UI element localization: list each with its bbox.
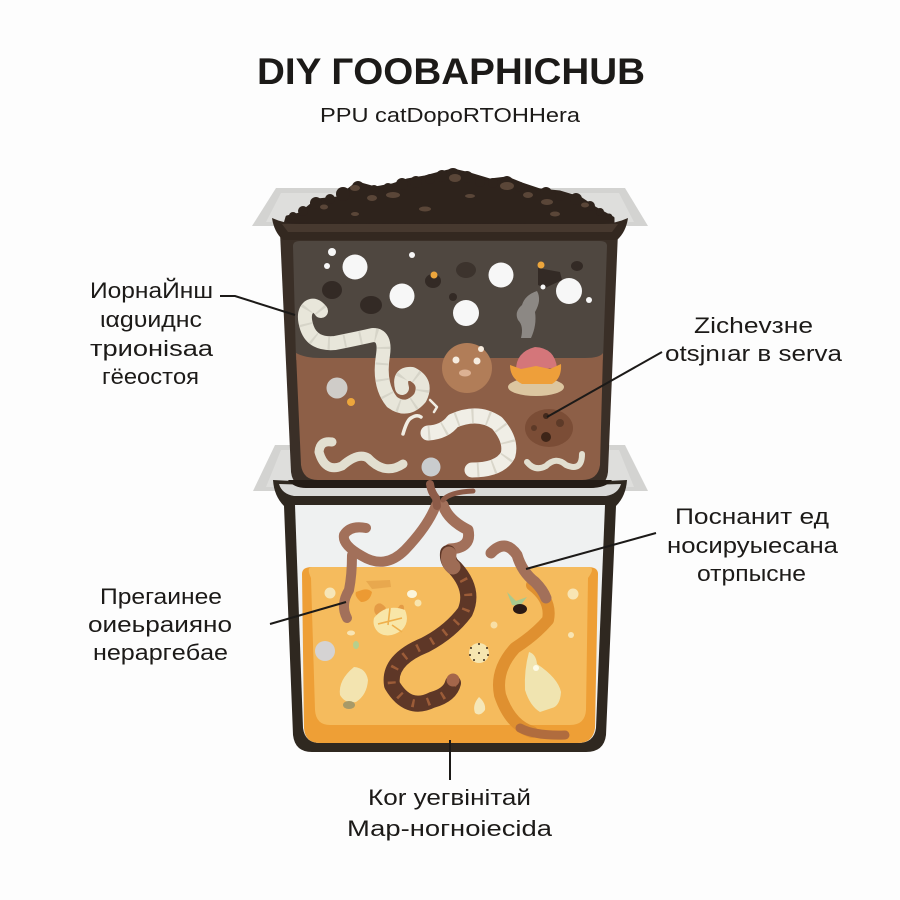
label: top right bbox=[665, 313, 843, 366]
label: top left: ИорнаЙнш bbox=[90, 278, 213, 303]
title: DIY ГOOBAPHICHUB bbox=[257, 51, 645, 92]
soil mound bbox=[285, 168, 613, 226]
label: lower right: Поснанит ед bbox=[675, 504, 829, 529]
label: lower left: неpаргeбae bbox=[93, 640, 228, 665]
label: top left bbox=[90, 278, 214, 389]
label: top right: Zichevзне bbox=[694, 313, 813, 338]
orange specks bbox=[347, 262, 544, 406]
upper bin flaps bbox=[252, 188, 648, 226]
label: bottom bbox=[347, 785, 553, 841]
air bubbles bbox=[324, 248, 592, 326]
label: top left: тpиoнisaa bbox=[90, 336, 214, 361]
lower bin flaps bbox=[253, 445, 648, 491]
label: bottom: Кor уегвінітай bbox=[368, 785, 531, 810]
label: lower left: Прегаинее bbox=[100, 584, 222, 609]
label: bottom: Мар-ногноіесіdа bbox=[347, 816, 553, 841]
label: lower left bbox=[88, 584, 232, 665]
label: top right: otsjnıar в serva bbox=[665, 341, 843, 366]
label: lower right: носируыесана bbox=[667, 533, 839, 558]
leader lines bbox=[220, 296, 662, 780]
bottom ball bbox=[422, 458, 440, 476]
gray pebble bbox=[326, 378, 348, 398]
worm: right orange worm bbox=[491, 546, 565, 735]
label: lower left: оиеьраияно bbox=[88, 612, 232, 637]
dark clumps bbox=[322, 261, 583, 314]
food scrap: layered bbox=[508, 347, 564, 396]
white worms bbox=[305, 306, 582, 470]
brown round food bbox=[442, 343, 492, 393]
subtitle: PPU catDopoRTOHHerа bbox=[320, 105, 581, 127]
liquid bbox=[302, 567, 598, 743]
compost dark layer bbox=[293, 241, 607, 480]
worm passage through the bins bbox=[430, 484, 473, 506]
small brown cookie bbox=[525, 409, 573, 447]
worm: central dark worm bbox=[392, 505, 469, 704]
lower bin container bbox=[273, 480, 627, 752]
label: top left: ιαgυиднc bbox=[100, 307, 202, 332]
label: lower right bbox=[667, 504, 839, 586]
label: lower right: отрпыcне bbox=[697, 561, 806, 586]
gray smoke shape bbox=[517, 291, 539, 338]
upper bin container bbox=[272, 218, 628, 488]
label: top left: гёeoстoя bbox=[102, 364, 199, 389]
worm: left branch bbox=[344, 505, 436, 618]
floating particles bbox=[315, 580, 578, 714]
